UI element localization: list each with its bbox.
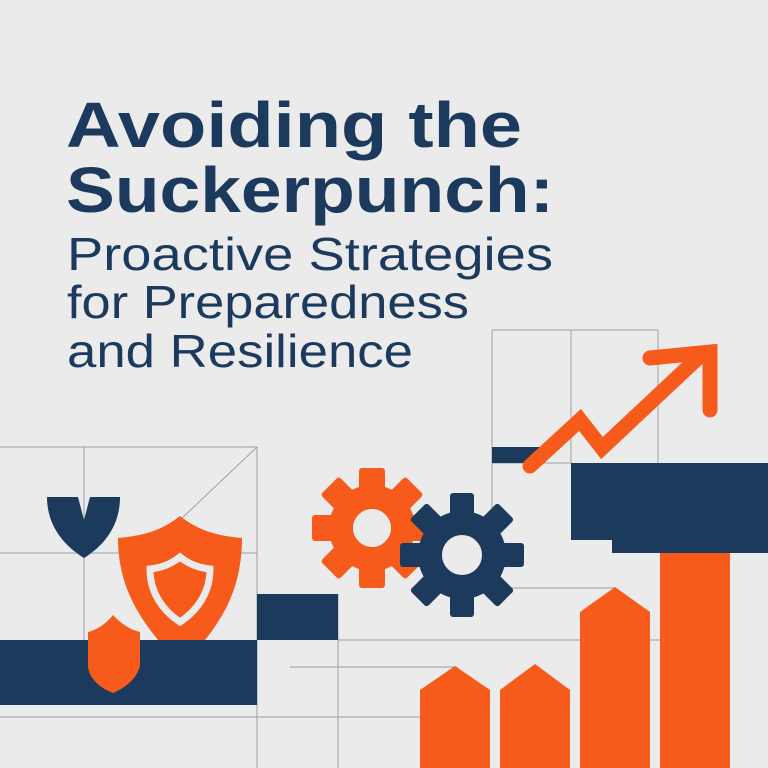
icon: navy gear bbox=[400, 493, 524, 617]
title: Proactive Strategies bbox=[67, 228, 553, 280]
title: for Preparedness bbox=[67, 276, 469, 328]
icon: small orange shield bbox=[88, 615, 140, 693]
icon: navy shield bbox=[47, 497, 120, 558]
title bbox=[66, 89, 554, 377]
title: and Resilience bbox=[67, 325, 413, 377]
title: Suckerpunch: bbox=[66, 154, 554, 226]
icon: orange shield bbox=[118, 516, 242, 640]
title: Avoiding the bbox=[66, 89, 522, 161]
navy blocks bbox=[0, 447, 768, 705]
icon: orange gear bbox=[312, 468, 432, 588]
bar chart bbox=[420, 553, 730, 768]
arrow: trend up bbox=[530, 352, 710, 466]
